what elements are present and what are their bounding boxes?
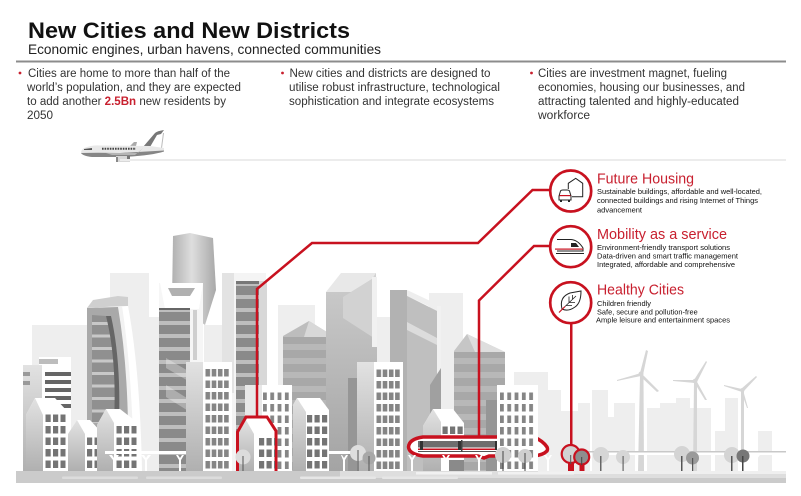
apartment: tall centre bbox=[357, 362, 403, 471]
heading: future housing: Future Housing bbox=[597, 172, 694, 188]
tower: hex left bbox=[283, 321, 335, 471]
apartment: behind red house bbox=[245, 385, 292, 471]
text block: investment: workforce bbox=[537, 110, 590, 122]
tower: rear twisted bbox=[172, 233, 216, 325]
text block: population bbox=[19, 68, 241, 122]
description: healthy cities: Safe, secure and pollution-free bbox=[597, 308, 698, 316]
section rule bbox=[120, 159, 786, 161]
icon: train bbox=[550, 226, 591, 267]
text block: infrastructure: utilise robust infrastructure, technological bbox=[289, 82, 500, 94]
icon: airplane bbox=[81, 130, 164, 162]
red trees bbox=[562, 445, 589, 471]
text block: population: 2050 bbox=[27, 110, 53, 122]
house 4 bbox=[293, 398, 329, 471]
skyline: background blocks bbox=[32, 273, 772, 471]
description: future housing: advancement bbox=[597, 206, 642, 214]
description: future housing: connected buildings and rising Internet of Things bbox=[597, 196, 758, 205]
text block: infrastructure: New cities and districts are designed to bbox=[290, 68, 490, 80]
text block: investment: attracting talented and highly-educated bbox=[538, 96, 739, 108]
heading: healthy cities: Healthy Cities bbox=[597, 282, 684, 298]
tower: striped right tower bbox=[222, 273, 267, 471]
description: future housing: Sustainable buildings, affordable and well-located, bbox=[597, 187, 762, 196]
tower: curved facade bbox=[87, 296, 142, 471]
elevated rail: left bbox=[105, 451, 786, 471]
description: mobility: Data-driven and smart traffic management bbox=[597, 252, 738, 260]
red connector: mobility bbox=[479, 246, 549, 437]
panel: mobility as a service bbox=[550, 226, 738, 269]
text block: population: Cities are home to more than half of the bbox=[28, 68, 230, 80]
text block: investment: Cities are investment magnet, fueling bbox=[538, 68, 727, 80]
rail posts right bbox=[408, 455, 760, 471]
text block: infrastructure: sophistication and integrate ecosystems bbox=[289, 96, 494, 108]
description: mobility: Environment-friendly transport solutions bbox=[597, 243, 730, 252]
icon: leaf bbox=[550, 282, 591, 323]
heading: mobility as a service: Mobility as a service bbox=[597, 227, 727, 243]
tower: tall centre right bbox=[390, 290, 441, 471]
description: healthy cities: Children friendly bbox=[597, 299, 651, 308]
apartment: right front bbox=[497, 385, 538, 471]
description: mobility: Integrated, affordable and comprehensive bbox=[597, 260, 735, 269]
header rule bbox=[16, 60, 786, 62]
red connector: healthy cities bbox=[570, 323, 572, 445]
tower: tall centre left bbox=[326, 273, 377, 471]
title: New Cities and New Districts bbox=[28, 18, 350, 43]
description: future housing bbox=[597, 187, 762, 214]
text block: infrastructure bbox=[281, 68, 500, 108]
wind turbines bbox=[617, 350, 757, 471]
ground bbox=[16, 471, 786, 483]
panel: healthy cities bbox=[550, 282, 730, 325]
description: healthy cities: Ample leisure and entertainment spaces bbox=[596, 316, 730, 325]
house 3 bbox=[97, 409, 138, 471]
red house outline bbox=[238, 417, 276, 471]
tower: hex right bbox=[454, 334, 505, 471]
apartment: centre left bbox=[186, 362, 232, 471]
trees bbox=[236, 445, 750, 471]
text block: population: to add another 2.5Bn new residents by bbox=[27, 96, 226, 108]
subtitle: Economic engines, urban havens, connected communities bbox=[28, 41, 381, 57]
text block: investment bbox=[530, 68, 745, 122]
text block: investment: economies, housing our businesses, and bbox=[538, 82, 745, 94]
train highlight bbox=[408, 437, 548, 458]
house 1 bbox=[26, 398, 67, 471]
red connector: future housing bbox=[257, 190, 549, 417]
description: mobility bbox=[597, 243, 738, 269]
panel: future housing bbox=[550, 170, 762, 214]
tower: framed skyscraper bbox=[159, 283, 203, 471]
apartment: left rear bbox=[23, 357, 71, 471]
icon: house and car bbox=[550, 170, 591, 212]
text block: population: world’s population, and they are expected bbox=[26, 82, 241, 94]
description: healthy cities bbox=[596, 299, 730, 325]
house 2 bbox=[68, 420, 103, 471]
house 5 bbox=[423, 409, 464, 471]
elevated rail line right bbox=[585, 451, 786, 452]
